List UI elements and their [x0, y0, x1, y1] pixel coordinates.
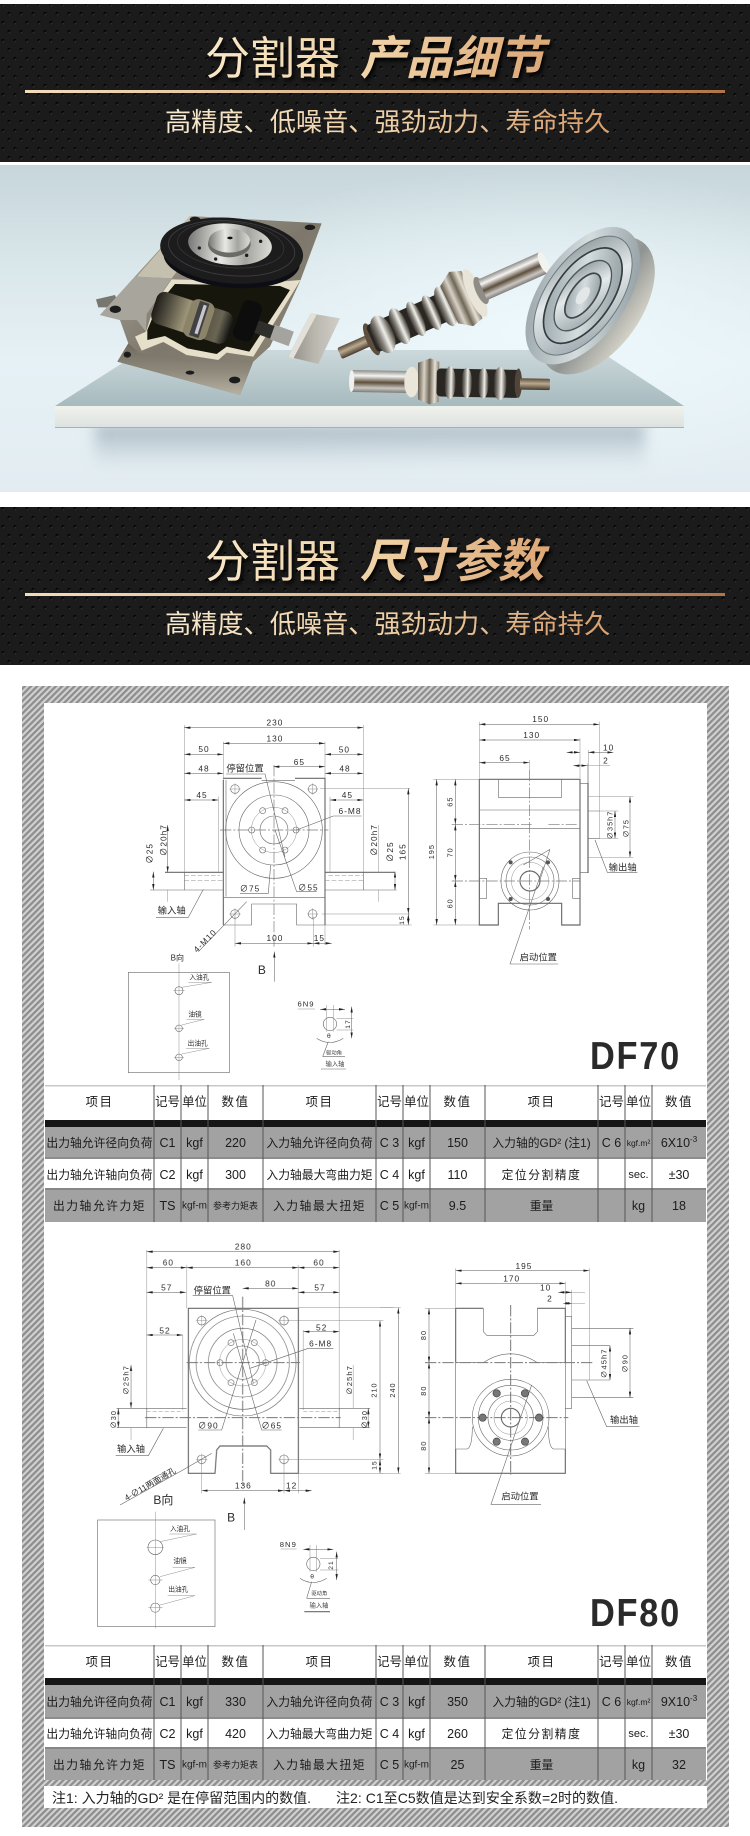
- table row 2: kgf: [186, 1727, 203, 1741]
- title: 分割器 尺寸参数: 分割器: [205, 536, 340, 587]
- table row 2: [46, 1727, 689, 1741]
- model label DF70: DF70: [590, 1035, 681, 1078]
- table row 3: [53, 1758, 686, 1772]
- drawing: DF80 side view: 10: [540, 1283, 551, 1293]
- input shaft key detail: 8N9: [280, 1540, 297, 1549]
- title: 分割器 产品细节: [205, 32, 551, 84]
- drawing: DF70 side view: 65: [445, 797, 454, 807]
- B-direction view: [128, 952, 229, 1080]
- table row 2: ±30: [669, 1168, 689, 1182]
- notes strip: 注2: C1至C5数值是达到安全系数=2时的数值.: [336, 1790, 618, 1806]
- shelf: [55, 350, 684, 428]
- header banner: product details: [0, 4, 750, 162]
- input shaft key detail: 6N9: [297, 999, 315, 1008]
- drawing: DF80 side view: ∅45h7: [599, 1348, 608, 1378]
- table row 1: 9X10: [661, 1695, 690, 1709]
- table header row: 数值: [221, 1094, 250, 1109]
- table header row: 记号: [599, 1655, 624, 1669]
- drawing: DF70 front view: 165: [398, 843, 408, 860]
- table row 1: 入力轴的GD² (注1): [492, 1136, 591, 1150]
- drawing: DF80 front view: ∅30: [109, 1410, 118, 1429]
- drawing: DF70 front view: ∅75: [240, 884, 260, 894]
- header banner: dimensions and parameters: [0, 507, 750, 665]
- table row 2: ±30: [669, 1727, 689, 1741]
- drawing: DF80 front view: 6-M8: [309, 1338, 332, 1348]
- drawing: DF80 side view: 80: [419, 1441, 428, 1451]
- table row 3: 入力轴最大扭矩: [273, 1199, 366, 1213]
- table row 2: kgf: [408, 1168, 425, 1182]
- table row 2: sec.: [628, 1169, 649, 1181]
- B-direction view: B向: [171, 952, 184, 962]
- drawing: DF70 front view: 15: [314, 933, 325, 943]
- drawing: DF80 side view: 80: [419, 1386, 428, 1396]
- B-direction view: 油镜: [188, 1009, 202, 1018]
- drawing: DF70 front view: 50: [339, 744, 350, 754]
- B-direction view: 油镜: [173, 1556, 187, 1565]
- drawing: DF70 side view: 65: [499, 753, 511, 763]
- table row 2: kgf: [186, 1168, 203, 1182]
- drawing: DF80 front view: 52: [159, 1326, 171, 1336]
- table row 3: kgf-m: [182, 1760, 207, 1770]
- table row 1: 220: [225, 1136, 246, 1150]
- drawing: DF70 front view: 65: [294, 757, 305, 767]
- table row 1: 330: [225, 1695, 246, 1709]
- table row 3: C 5: [380, 1758, 399, 1772]
- table row 2: 出力轴允许轴向负荷: [46, 1168, 153, 1182]
- table row 2: 定位分割精度: [502, 1168, 581, 1182]
- table row 2: 420: [225, 1727, 246, 1741]
- drawing: DF70 front view: B: [258, 963, 267, 977]
- drawing: DF70 front view: ∅20h7: [158, 824, 168, 856]
- table row 2: 入力轴最大弯曲力矩: [266, 1727, 373, 1741]
- B-direction view: [98, 1492, 215, 1628]
- table header row: 项目: [85, 1095, 114, 1109]
- input shaft key detail: [280, 1540, 338, 1612]
- drawing: DF80 side view: 240: [388, 1382, 397, 1398]
- table row 1: kgf.m²: [627, 1697, 650, 1707]
- drawing: DF70 side view: 195: [427, 844, 436, 859]
- table row 2: 300: [225, 1168, 246, 1182]
- worm shaft: upper: [327, 207, 678, 406]
- input shaft key detail: θ: [327, 1033, 332, 1040]
- drawing: DF70 front view: ∅25: [385, 841, 395, 862]
- table header row: 单位: [626, 1094, 651, 1109]
- table header row: 项目: [527, 1095, 556, 1109]
- drawing: DF80 front view: 57: [314, 1282, 326, 1292]
- drawing: DF70 side view: 70: [445, 847, 454, 857]
- input shaft key detail: 驱动角: [326, 1048, 342, 1056]
- drawing: DF80 front view: 12: [286, 1480, 297, 1490]
- table header row: 记号: [377, 1095, 402, 1109]
- drawing: DF70 side view: 输出轴: [609, 861, 637, 872]
- table header row: 单位: [626, 1654, 651, 1669]
- table row 1: C 6: [602, 1695, 621, 1709]
- subtitle: 高精度、低噪音、强劲动力、寿命持久: [165, 609, 610, 639]
- table header row: 单位: [404, 1094, 429, 1109]
- table header row: 单位: [182, 1094, 207, 1109]
- panel: striped frame with white sheet: [22, 686, 729, 1827]
- table row 1: C 6: [602, 1136, 621, 1150]
- drawing: DF70 side view: [427, 714, 637, 964]
- drawing: DF70 front view: 100: [267, 933, 283, 943]
- table header row: 单位: [404, 1654, 429, 1669]
- table row 1: C1: [160, 1136, 176, 1150]
- drawing: DF80 front view: 15: [371, 1460, 378, 1470]
- table row 3: 重量: [530, 1758, 553, 1772]
- table row 2: sec.: [628, 1728, 649, 1740]
- drawing: DF70 front view: ∅20h7: [369, 824, 379, 856]
- drawing: DF70 side view: 10: [603, 743, 614, 753]
- title: 分割器 产品细节: 分割器: [205, 33, 340, 84]
- table row 1: C 3: [380, 1695, 399, 1709]
- drawing: DF80 front view: ∅65: [261, 1420, 282, 1430]
- table row 3: TS: [160, 1199, 175, 1213]
- table header row: 项目: [305, 1655, 334, 1669]
- drawing: DF80 side view: 2: [547, 1293, 553, 1303]
- table row 2: C 4: [380, 1727, 399, 1741]
- title: 分割器 尺寸参数: [205, 535, 550, 587]
- input shaft key detail: 21: [328, 1560, 335, 1570]
- drawing: DF80 front view: 60: [313, 1257, 325, 1267]
- drawing: DF70 front view: ∅55: [298, 882, 319, 892]
- table header row: 数值: [665, 1094, 693, 1109]
- drawing: DF80 front view: B: [227, 1511, 236, 1525]
- table row 3: kg: [632, 1199, 645, 1213]
- table row 1: 350: [447, 1695, 468, 1709]
- B-direction view: 出油孔: [188, 1038, 208, 1047]
- drawing: DF70 front view: 230: [267, 717, 283, 727]
- drawing: DF70 side view: ∅35h7: [605, 811, 614, 839]
- drawing: DF80 front view: 57: [161, 1282, 172, 1292]
- B-direction view: B向: [153, 1492, 173, 1507]
- table row 1: 出力轴允许径向负荷: [46, 1136, 153, 1150]
- table header row: [85, 1654, 693, 1669]
- table row 2: 110: [448, 1168, 468, 1182]
- table header row: 项目: [85, 1655, 114, 1669]
- drawing: DF70 side view: 2: [603, 756, 609, 766]
- drawing: DF80 front view: 停留位置: [194, 1285, 231, 1296]
- drawing: DF80 side view: 启动位置: [501, 1491, 539, 1502]
- table row 1: C1: [160, 1695, 176, 1709]
- gold rule: [25, 593, 725, 596]
- table row 2: C2: [160, 1727, 176, 1741]
- drawing: DF80 front view: 210: [369, 1382, 378, 1398]
- table header row: [85, 1094, 693, 1109]
- drawing: DF80 front view: ∅25h7: [121, 1365, 130, 1395]
- shelf shadow: [95, 424, 645, 470]
- drawing: DF70 front view: 输入轴: [158, 904, 186, 915]
- drawing: DF80 front view: ∅25h7: [345, 1365, 354, 1395]
- drawing: DF70 front view: 48: [339, 763, 351, 773]
- worm shaft: lower: [349, 357, 550, 406]
- table row 3: 25: [451, 1758, 464, 1772]
- drawing: DF70 front view: 45: [342, 790, 353, 800]
- table row 3: 出力轴允许力矩: [53, 1199, 146, 1213]
- table row 3: [53, 1199, 686, 1213]
- table row 2: [46, 1168, 689, 1182]
- table: DF80 parameters: [45, 1645, 706, 1780]
- table header row: 单位: [182, 1654, 207, 1669]
- table row 2: C 4: [380, 1168, 399, 1182]
- table row 1: -3: [690, 1694, 698, 1702]
- drawing: DF80 front view: 280: [235, 1242, 252, 1252]
- drawing: DF80 side view: 输出轴: [610, 1414, 638, 1425]
- table row 2: 260: [447, 1727, 468, 1741]
- drawing: DF80 side view: [380, 1261, 639, 1504]
- table row 2: 出力轴允许轴向负荷: [46, 1727, 153, 1741]
- input shaft key detail: 输入轴: [310, 1600, 328, 1609]
- drawing: DF80 front view: 输入轴: [117, 1443, 145, 1454]
- input shaft key detail: 17: [345, 1019, 352, 1029]
- drawing: DF70 front view: 15: [399, 915, 406, 925]
- drawing: DF70 side view: 60: [445, 898, 454, 908]
- table row 3: 18: [672, 1199, 686, 1213]
- table row 1: kgf: [408, 1136, 425, 1150]
- table row 1: 150: [447, 1136, 468, 1150]
- table header row: 记号: [599, 1095, 624, 1109]
- drawing: DF70 front view: 45: [196, 790, 208, 800]
- table: DF70 parameters: [45, 1085, 706, 1222]
- drawing: DF80 side view: 195: [516, 1261, 532, 1271]
- title: 分割器 尺寸参数: 尺寸参数: [360, 535, 550, 587]
- table row 3: 参考力矩表: [213, 1759, 258, 1770]
- drawing: DF70 front view: 50: [198, 744, 210, 754]
- drawing: DF70 front view: 130: [267, 734, 283, 744]
- table row 3: 出力轴允许力矩: [53, 1758, 146, 1772]
- table header row: 记号: [377, 1655, 402, 1669]
- table row 3: kgf-m: [182, 1200, 207, 1212]
- drawing: DF70 front view: 6-M8: [339, 806, 361, 816]
- input shaft key detail: 驱动角: [311, 1589, 327, 1597]
- drawing: DF80 front view: 4-∅11两面通孔: [123, 1465, 178, 1503]
- notes strip: [44, 1786, 707, 1808]
- drawing: DF70 front view: ∅25: [144, 843, 154, 864]
- gold rule: [25, 90, 725, 93]
- panel: product photo on shelf: [0, 165, 750, 492]
- B-direction view: 入油孔: [189, 972, 210, 981]
- table row 3: TS: [160, 1758, 175, 1772]
- table row 1: 入力轴允许径向负荷: [266, 1695, 373, 1709]
- table row 1: kgf: [186, 1695, 203, 1709]
- table row 2: 入力轴最大弯曲力矩: [266, 1168, 373, 1182]
- notes strip: 注1: 入力轴的GD² 是在停留范围内的数值.: [52, 1790, 311, 1806]
- drawing: DF80 front view: 136: [235, 1480, 252, 1490]
- drawing: DF70 front view: 停留位置: [226, 763, 264, 774]
- drawing: DF80 side view: 80: [419, 1330, 428, 1340]
- table header row: 数值: [443, 1654, 472, 1669]
- table row 3: 参考力矩表: [213, 1200, 258, 1211]
- drawing: DF70 side view: 150: [532, 714, 549, 724]
- cam disc: [502, 207, 678, 395]
- drawing: DF80 front view: ∅90: [198, 1420, 219, 1430]
- table row 3: C 5: [380, 1199, 399, 1213]
- drawing: DF80 front view: 160: [235, 1257, 252, 1267]
- drawing: DF70 front view: [128, 717, 412, 1080]
- table row 3: kg: [632, 1758, 645, 1772]
- table header row: 数值: [443, 1094, 472, 1109]
- table row 1: kgf: [186, 1136, 203, 1150]
- title: 分割器 产品细节: 产品细节: [360, 32, 551, 84]
- table row 1: 6X10: [661, 1136, 690, 1150]
- drawing: DF70 front view: 4-M10: [191, 927, 219, 954]
- model label DF80: DF80: [590, 1592, 681, 1635]
- drawing: DF80 side view: ∅90: [620, 1354, 629, 1373]
- stripe band under table: [44, 1780, 707, 1786]
- B-direction view: 入油孔: [170, 1524, 190, 1533]
- table header row: 数值: [221, 1654, 250, 1669]
- table row 1: [46, 1134, 698, 1150]
- table row 1: kgf: [408, 1695, 425, 1709]
- table row 1: 入力轴允许径向负荷: [266, 1136, 373, 1150]
- table row 1: [46, 1694, 698, 1709]
- B-direction view: 出油孔: [168, 1584, 189, 1593]
- table row 1: 入力轴的GD² (注1): [492, 1695, 591, 1709]
- drawing: DF80 front view: 60: [163, 1257, 174, 1267]
- drawing: DF80 front view: 80: [265, 1278, 276, 1288]
- subtitle: 高精度、低噪音、强劲动力、寿命持久: [165, 107, 610, 137]
- table row 1: kgf.m²: [627, 1138, 650, 1148]
- table row 2: C2: [160, 1168, 176, 1182]
- drawing: DF80 front view: 52: [316, 1322, 327, 1332]
- input shaft key detail: [297, 999, 353, 1069]
- table row 1: 出力轴允许径向负荷: [46, 1695, 153, 1709]
- drawing: DF70 side view: 启动位置: [520, 951, 557, 962]
- drawing: DF80 front view: [98, 1242, 393, 1628]
- table row 3: kgf-m: [404, 1760, 429, 1770]
- drawing: DF80 side view: 170: [503, 1273, 520, 1283]
- table row 2: 定位分割精度: [502, 1727, 581, 1741]
- table header row: 记号: [155, 1095, 180, 1109]
- table header row: 记号: [155, 1655, 180, 1669]
- drawing: DF70 side view: ∅75: [621, 819, 630, 838]
- drawing: DF70 front view: 48: [198, 763, 210, 773]
- drawing: DF70 side view: 130: [523, 730, 540, 740]
- table row 3: 9.5: [449, 1199, 466, 1213]
- table row 3: 入力轴最大扭矩: [273, 1758, 366, 1772]
- table row 1: C 3: [380, 1136, 399, 1150]
- table row 3: kgf-m: [404, 1200, 429, 1212]
- drawing: DF80 front view: ∅30: [360, 1410, 369, 1429]
- table row 3: 32: [672, 1758, 686, 1772]
- table header row: 项目: [527, 1655, 556, 1669]
- table header row: 数值: [665, 1654, 693, 1669]
- table row 1: -3: [690, 1134, 698, 1144]
- input shaft key detail: θ: [310, 1573, 315, 1580]
- table header row: 项目: [305, 1095, 334, 1109]
- table row 2: kgf: [408, 1727, 425, 1741]
- table row 3: 重量: [530, 1199, 553, 1213]
- input shaft key detail: 输入轴: [326, 1059, 344, 1068]
- gearbox with cut-away housing: [96, 212, 340, 395]
